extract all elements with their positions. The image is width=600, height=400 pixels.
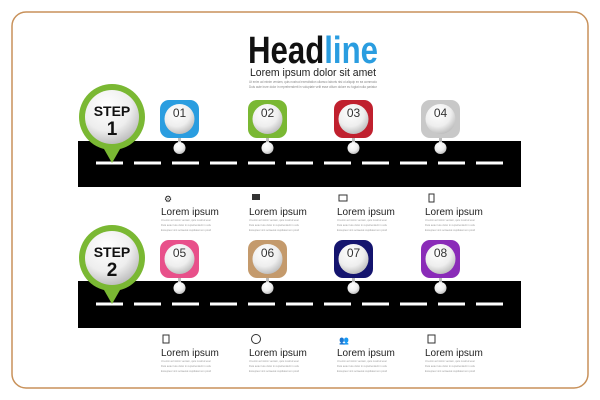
text block 2: Duis aute irure dolor in reprehenderit in volu	[249, 223, 299, 227]
text block 6: Duis aute irure dolor in reprehenderit in volu	[249, 364, 299, 368]
badge 06: 06	[261, 246, 274, 260]
text block 7: Lorem ipsum	[337, 348, 395, 359]
text block 3: Ut enim ad minim veniam, quis nostrud exer	[337, 218, 387, 222]
text block 6: Ut enim ad minim veniam, quis nostrud exer	[249, 359, 299, 363]
text block 7: Excepteur sint occaecat cupidatat non proid	[337, 369, 387, 373]
text block 2: Ut enim ad minim veniam, quis nostrud exer	[249, 218, 299, 222]
text block 6: Lorem ipsum	[249, 348, 307, 359]
text block 5: Excepteur sint occaecat cupidatat non proid	[161, 369, 211, 373]
text block 4	[425, 194, 483, 232]
text block 1: ⚙	[164, 194, 172, 204]
badge 06	[248, 240, 287, 294]
text block 2: Lorem ipsum	[249, 207, 307, 218]
text block 3: Duis aute irure dolor in reprehenderit in volu	[337, 223, 387, 227]
badge 04	[421, 100, 460, 154]
text block 8	[425, 335, 483, 373]
text block 4: Ut enim ad minim veniam, quis nostrud exer	[425, 218, 475, 222]
badge 02	[248, 100, 287, 154]
text block 5: Lorem ipsum	[161, 348, 219, 359]
badge 01	[160, 100, 199, 154]
step 2 pin: 2	[107, 260, 117, 281]
text block 7	[337, 336, 395, 373]
badge 03	[334, 100, 373, 154]
intro text: Duis aute irure dolor in reprehenderit in voluptate velit esse cillum dolore eu fugiat nulla pariatur	[249, 85, 378, 89]
text block 7: Duis aute irure dolor in reprehenderit in volu	[337, 364, 387, 368]
road 2	[78, 281, 521, 328]
step 2 pin: STEP	[94, 244, 130, 260]
badge 03: 03	[347, 106, 360, 120]
intro text: Ut enim ad minim veniam, quis nostrud exercitation ullamco laboris nisi ut aliquip ex ea commodo	[249, 80, 377, 84]
text block 2: Excepteur sint occaecat cupidatat non proid	[249, 228, 299, 232]
badge 01: 01	[173, 106, 186, 120]
intro text	[249, 80, 378, 89]
text block 4: Excepteur sint occaecat cupidatat non proid	[425, 228, 475, 232]
badge 08: 08	[434, 246, 447, 260]
badge 05	[160, 240, 199, 294]
step 1 pin: STEP	[94, 103, 130, 119]
subtitle: Lorem ipsum dolor sit amet	[250, 67, 376, 79]
badge 02: 02	[261, 106, 274, 120]
text block 3: Lorem ipsum	[337, 207, 395, 218]
text block 5: Ut enim ad minim veniam, quis nostrud exer	[161, 359, 211, 363]
text block 8: Duis aute irure dolor in reprehenderit in volu	[425, 364, 475, 368]
text block 3	[337, 195, 395, 232]
text block 7: Ut enim ad minim veniam, quis nostrud exer	[337, 359, 387, 363]
text block 6: Excepteur sint occaecat cupidatat non proid	[249, 369, 299, 373]
text block 5: Duis aute irure dolor in reprehenderit in volu	[161, 364, 211, 368]
badge 04: 04	[434, 106, 447, 120]
text block 1: Duis aute irure dolor in reprehenderit in volu	[161, 223, 211, 227]
title: Headline	[248, 30, 378, 72]
text block 3: Excepteur sint occaecat cupidatat non proid	[337, 228, 387, 232]
text block 1: Lorem ipsum	[161, 207, 219, 218]
text block 8: Ut enim ad minim veniam, quis nostrud exer	[425, 359, 475, 363]
text block 4: Lorem ipsum	[425, 207, 483, 218]
road 1	[78, 141, 521, 187]
badge 05: 05	[173, 246, 186, 260]
text block 7: 👥	[339, 336, 349, 345]
text block 8: Lorem ipsum	[425, 348, 483, 359]
text block 1: Ut enim ad minim veniam, quis nostrud exer	[161, 218, 211, 222]
step 1 pin	[79, 84, 145, 163]
text block 6	[249, 334, 307, 373]
text block 8: Excepteur sint occaecat cupidatat non proid	[425, 369, 475, 373]
badge 07: 07	[347, 246, 360, 260]
text block 1: Excepteur sint occaecat cupidatat non proid	[161, 228, 211, 232]
text block 2	[249, 194, 307, 232]
step 1 pin: 1	[107, 119, 118, 140]
text block 1	[161, 194, 219, 232]
badge 07	[334, 240, 373, 294]
step 2 pin	[79, 225, 145, 304]
text block 5	[161, 335, 219, 373]
text block 4: Duis aute irure dolor in reprehenderit in volu	[425, 223, 475, 227]
badge 08	[421, 240, 460, 294]
